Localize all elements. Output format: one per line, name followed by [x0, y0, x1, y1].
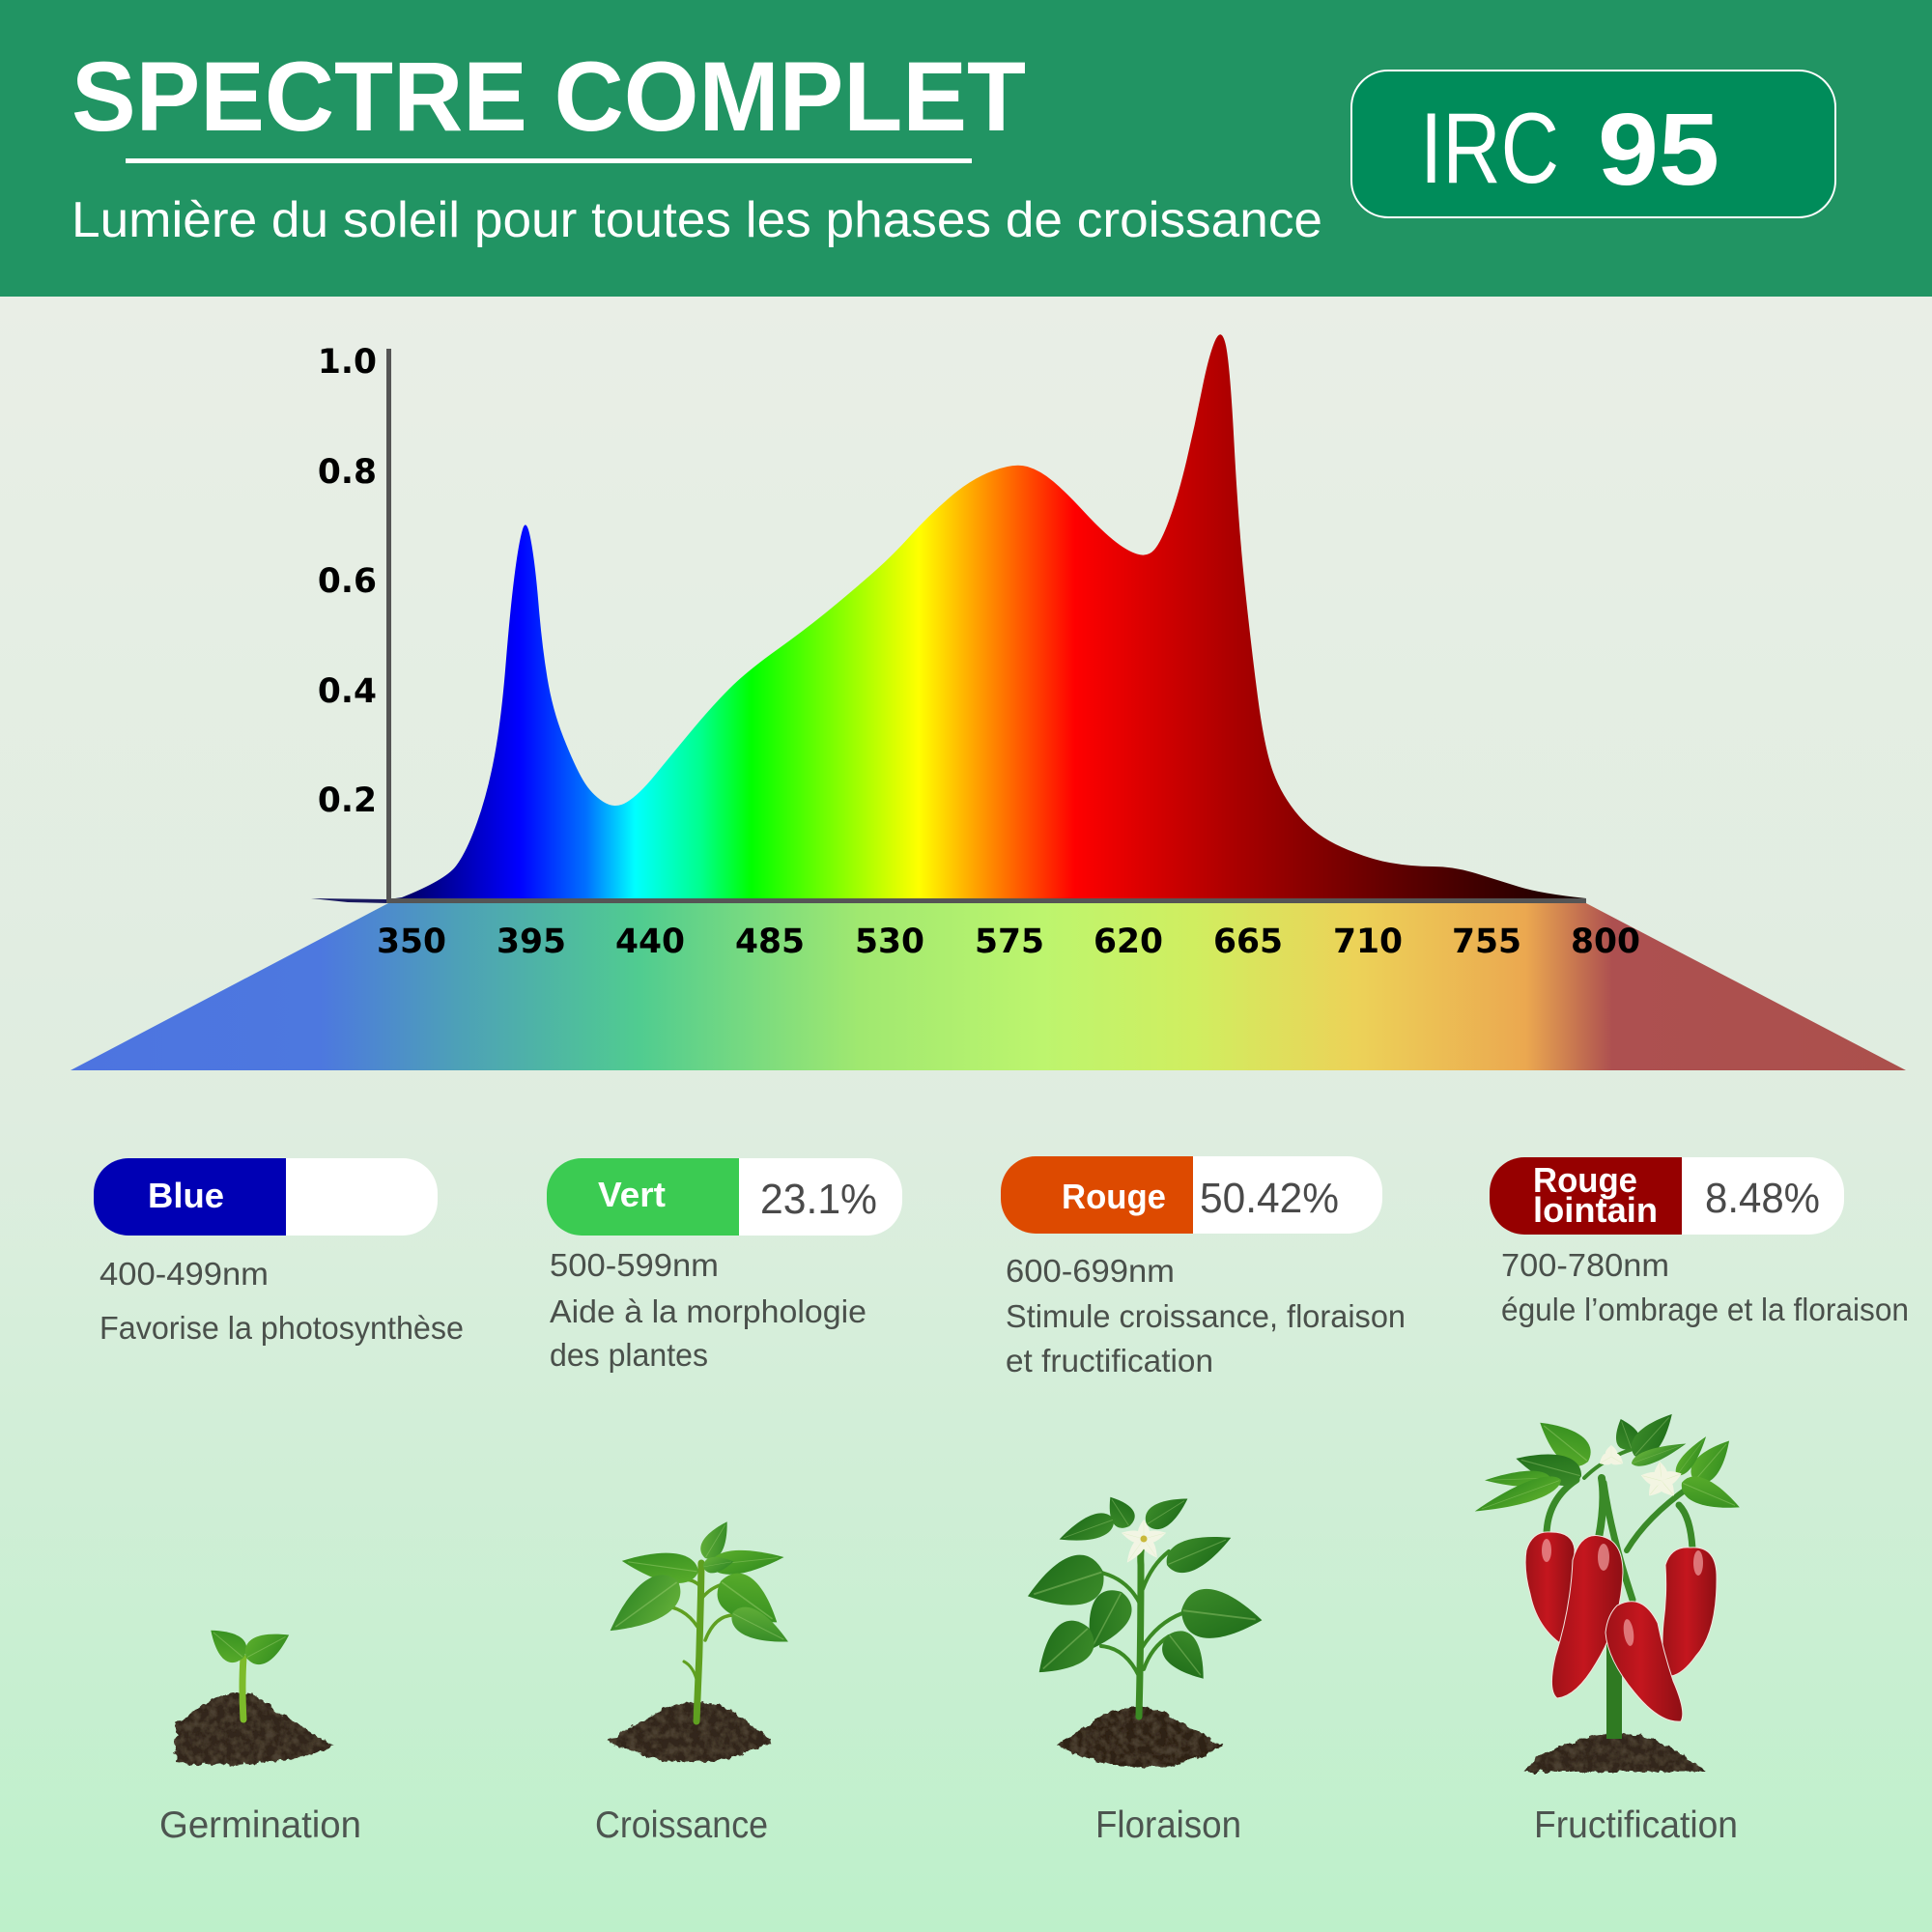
left sliver: [311, 898, 388, 903]
title: SPECTRE COMPLET: [71, 42, 1026, 152]
far red description: égule l’ombrage et la floraison: [1501, 1292, 1909, 1327]
red description: 600-699nm: [1006, 1253, 1175, 1289]
plant: germination: [176, 1620, 331, 1765]
green description: 500-599nm: [550, 1247, 719, 1283]
x axis labels: 395: [497, 923, 566, 961]
red description: et fructification: [1006, 1343, 1213, 1378]
spectrum curve: [388, 334, 1586, 900]
y axis labels: 0.2: [318, 781, 377, 820]
green pill: Vert: [598, 1175, 666, 1214]
spectrum chart: [311, 334, 1640, 961]
far red description: 700-780nm: [1501, 1247, 1669, 1283]
blue pill: [94, 1158, 438, 1236]
x axis labels: 530: [855, 923, 924, 961]
x axis labels: 710: [1333, 923, 1403, 961]
stage labels: Germination: [159, 1804, 361, 1846]
panel: green: [547, 1158, 902, 1373]
far red pill: [1490, 1157, 1844, 1235]
blue description: Favorise la photosynthèse: [99, 1310, 464, 1346]
far red pill: Rouge: [1533, 1160, 1637, 1200]
blue description: 400-499nm: [99, 1256, 269, 1292]
flower: [1120, 1520, 1168, 1566]
flowers: [1597, 1445, 1684, 1500]
stage labels: Floraison: [1095, 1804, 1241, 1846]
header band: [0, 0, 1932, 297]
IRC badge: 95: [1598, 93, 1719, 207]
y axis labels: 1.0: [318, 343, 377, 382]
panel: red: [1001, 1156, 1406, 1378]
IRC badge: [1351, 71, 1835, 217]
x axis labels: 440: [615, 923, 685, 961]
green description: Aide à la morphologie: [550, 1293, 867, 1329]
plant: flowering: [1020, 1489, 1264, 1768]
red description: Stimule croissance, floraison: [1006, 1298, 1406, 1334]
green pill: 23.1%: [760, 1176, 877, 1223]
red pill: Rouge: [1062, 1177, 1166, 1216]
x axis labels: 665: [1213, 923, 1283, 961]
x axis labels: 575: [975, 923, 1044, 961]
green description: des plantes: [550, 1337, 708, 1373]
peppers: [1525, 1532, 1575, 1650]
plant: growth: [599, 1517, 794, 1762]
y axis labels: 0.6: [318, 562, 377, 601]
x axis labels: 485: [735, 923, 805, 961]
red pill: 50.42%: [1200, 1175, 1339, 1222]
plant: fruiting: [1471, 1406, 1745, 1772]
stage labels: Fructification: [1534, 1804, 1738, 1846]
stage labels: [159, 1804, 1738, 1846]
x axis labels: 755: [1452, 923, 1521, 961]
IRC badge: IRC: [1420, 93, 1559, 205]
subtitle: Lumière du soleil pour toutes les phases de croissance: [71, 192, 1322, 248]
stage labels: Croissance: [595, 1804, 768, 1846]
x axis labels: 620: [1094, 923, 1163, 961]
panel: blue: [94, 1158, 464, 1346]
green pill: [547, 1158, 902, 1236]
far red pill: lointain: [1533, 1190, 1658, 1230]
x axis labels: 800: [1571, 923, 1640, 961]
y axis labels: [318, 343, 377, 820]
x axis labels: 350: [377, 923, 446, 961]
spectrum band trapezoid: [71, 903, 1906, 1070]
x axis labels: [377, 923, 1640, 961]
y axis labels: 0.4: [318, 672, 377, 711]
panel: far red: [1490, 1157, 1909, 1327]
axes: [386, 349, 1586, 903]
blue pill: Blue: [148, 1176, 224, 1215]
y axis labels: 0.8: [318, 453, 377, 492]
title underline: [126, 158, 972, 163]
red pill: [1001, 1156, 1382, 1234]
far red pill: 8.48%: [1705, 1175, 1820, 1222]
